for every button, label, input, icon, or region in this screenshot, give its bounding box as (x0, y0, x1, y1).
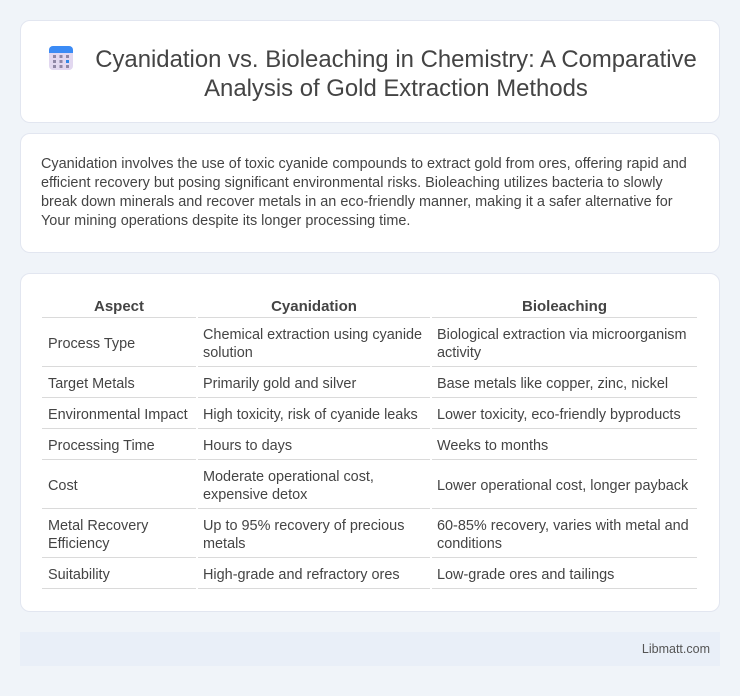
row: Cost (48, 469, 688, 503)
row: Environmental Impact: Environmental Impact (48, 407, 188, 423)
title: Cyanidation vs. Bioleaching in Chemistry: A Comparative (95, 46, 697, 73)
row: Environmental Impact: High toxicity, risk of cyanide leaks (203, 407, 418, 423)
row: Process Type: Chemical extraction using cyanide (203, 327, 422, 343)
summary text: Your mining operations despite its longer processing time. (41, 213, 410, 229)
title: Analysis of Gold Extraction Methods (204, 75, 588, 102)
row: Metal Recovery Efficiency: metals (203, 536, 246, 552)
title (95, 46, 697, 102)
row: Processing Time (48, 438, 548, 454)
row: Suitability: High-grade and refractory ores (203, 567, 400, 583)
row: Suitability: Suitability (48, 567, 110, 583)
row: Process Type: solution (203, 345, 253, 361)
row: Environmental Impact (48, 407, 681, 423)
summary text: break down minerals and recover metals in an eco-friendly manner, making it a safer alternative for (41, 194, 673, 210)
row: Environmental Impact: Lower toxicity, eco-friendly byproducts (437, 407, 681, 423)
row: Cost: Moderate operational cost, (203, 469, 374, 485)
panel: comparison table card (20, 273, 720, 612)
summary text: Cyanidation involves the use of toxic cyanide compounds to extract gold from ores, offering rapid and (41, 156, 687, 172)
row: Process Type: activity (437, 345, 481, 361)
row: Processing Time: Processing Time (48, 438, 155, 454)
summary text (41, 156, 687, 229)
row: Metal Recovery Efficiency (48, 518, 689, 552)
row: Target Metals (48, 376, 668, 392)
row: Process Type: Process Type (48, 336, 135, 352)
row: Suitability: Low-grade ores and tailings (437, 567, 614, 583)
summary text: efficient recovery but posing significant environmental risks. Bioleaching utilizes bacteria to slowly (41, 175, 663, 191)
footer bar: Libmatt.com (642, 642, 710, 656)
row: Suitability (48, 567, 614, 583)
icon: calendar (49, 46, 73, 70)
footer bar (20, 632, 720, 666)
row: Processing Time: Hours to days (203, 438, 292, 454)
row: Metal Recovery Efficiency: 60-85% recovery, varies with metal and (437, 518, 689, 534)
row: Cost: expensive detox (203, 487, 307, 503)
row: Target Metals: Primarily gold and silver (203, 376, 356, 392)
table header: Cyanidation: Cyanidation (271, 298, 357, 315)
row: Metal Recovery Efficiency: conditions (437, 536, 502, 552)
panel: summary card (20, 133, 720, 253)
comparison table (42, 317, 697, 589)
row: Processing Time: Weeks to months (437, 438, 548, 454)
row: Cost: Cost (48, 478, 78, 494)
row: Metal Recovery Efficiency: Up to 95% recovery of precious (203, 518, 404, 534)
table header: Aspect: Aspect (94, 298, 144, 315)
row: Cost: Lower operational cost, longer payback (437, 478, 688, 494)
row: Target Metals: Base metals like copper, zinc, nickel (437, 376, 668, 392)
row: Metal Recovery Efficiency: Metal Recovery (48, 518, 148, 534)
row: Process Type (48, 327, 687, 361)
row: Metal Recovery Efficiency: Efficiency (48, 536, 110, 552)
row: Process Type: Biological extraction via microorganism (437, 327, 687, 343)
table header: Bioleaching: Bioleaching (522, 298, 607, 315)
panel: title card (20, 20, 720, 123)
row: Target Metals: Target Metals (48, 376, 135, 392)
